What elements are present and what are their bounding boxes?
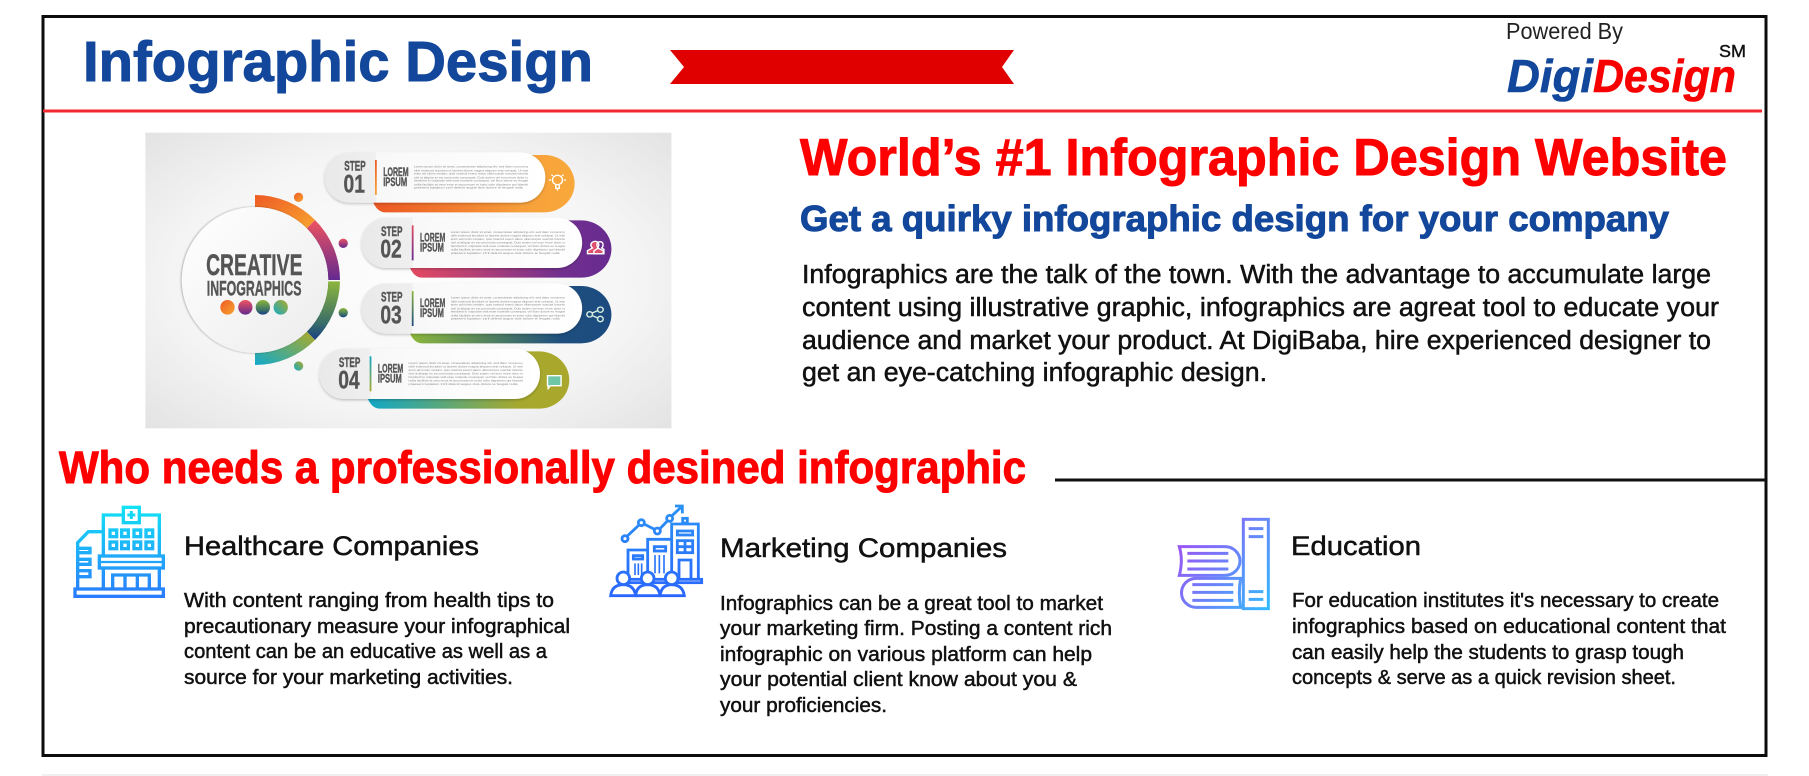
panel: step 02: hendrerit in vulputate velit esse molestie consequat, vel illum dolore eu feugiat — [451, 244, 565, 248]
panel: step 04: IPSUM — [378, 371, 402, 385]
panel: step 03: praesent luptatum zzril delenit augue duis dolore te feugait nulla — [451, 317, 560, 321]
panel: step 04: praesent luptatum zzril delenit augue duis dolore te feugait nulla — [409, 382, 518, 386]
circular badge — [182, 193, 348, 371]
body text: your potential client know about you & — [720, 668, 1077, 691]
header divider — [43, 110, 1762, 112]
panel: step 03: nibh euismod tincidunt ut laoreet dolore magna aliquam erat volutpat. Ut wisi — [451, 299, 565, 303]
intro paragraph: content using illustrative graphic, infographics are agreat tool to educate your — [802, 294, 1720, 322]
panel: step 03: hendrerit in vulputate velit esse molestie consequat, vel illum dolore eu feugiat — [451, 310, 565, 314]
heading: Education — [1291, 531, 1421, 561]
body text: precautionary measure your infographical — [184, 615, 570, 638]
heading: Healthcare Companies — [184, 531, 479, 561]
panel: step 03: nisl ut aliquip ex ea commodo consequat. Duis autem vel eum iriure dolor in — [451, 306, 565, 310]
panel: step 04: nibh euismod tincidunt ut laoreet dolore magna aliquam erat volutpat. Ut wisi — [409, 365, 523, 369]
panel: step 03: 03 — [380, 300, 402, 329]
intro paragraph: get an eye-catching infographic design. — [802, 359, 1267, 387]
panel: step 01: enim ad minim veniam, quis nostrud exerci tation ullamcorper suscipit lobortis — [414, 172, 529, 176]
header — [83, 18, 1746, 102]
intro paragraph: audience and market your product. At DigiBaba, hire experienced designer to — [802, 327, 1711, 355]
logo: DigiDesign: Design — [1593, 50, 1736, 102]
title: Infographic Design — [83, 30, 593, 94]
coloured ring — [255, 195, 340, 365]
badge heading: CREATIVE — [206, 248, 302, 282]
icon: light bulb — [549, 175, 566, 191]
infographic image panel — [145, 133, 671, 428]
panel: step 04: LOREM — [378, 361, 403, 375]
panel: step 01: LOREM — [383, 164, 409, 179]
logo: DigiDesign: Digi — [1507, 50, 1594, 102]
panel: step 04 — [319, 349, 569, 409]
bottom strip — [42, 774, 1768, 776]
panel: marketing — [611, 506, 1112, 717]
subheading: Get a quirky infographic design for your company — [800, 198, 1669, 239]
body text: source for your marketing activities. — [184, 666, 513, 689]
panel: step 02: nulla facilisis at vero eros et accumsan et iusto odio dignissim qui blandit — [451, 248, 565, 252]
panel: step 03: LOREM — [420, 295, 445, 310]
panel: step 04: STEP — [339, 355, 361, 371]
badge subheading: INFOGRAPHICS — [207, 276, 301, 300]
panel: intro — [800, 129, 1727, 387]
panel: step 04: hendrerit in vulputate velit esse molestie consequat, vel illum dolore eu feugiat — [409, 375, 523, 379]
logo: DigiDesign: SM — [1719, 41, 1746, 61]
intro paragraph: Infographics are the talk of the town. With the advantage to accumulate large — [802, 261, 1711, 289]
panel: step 01: nulla facilisis at vero eros et accumsan et iusto odio dignissim qui blandit — [414, 182, 528, 186]
heading: Marketing Companies — [720, 533, 1007, 563]
panel: step 03 — [361, 283, 611, 343]
panel: step 01: STEP — [344, 159, 366, 175]
panel: step 01: nisl ut aliquip ex ea commodo consequat. Duis autem vel eum iriure dolor in — [414, 175, 529, 179]
panel: step 01: 01 — [344, 169, 365, 198]
main heading: World’s #1 Infographic Design Website — [800, 129, 1727, 187]
panel: step 02: enim ad minim veniam, quis nostrud exerci tation ullamcorper suscipit lobortis — [451, 237, 565, 241]
panel: step 02: praesent luptatum zzril delenit augue duis dolore te feugait nulla — [451, 251, 560, 255]
panel: step 02 — [361, 218, 611, 278]
body text — [720, 592, 1112, 717]
panel: step 02: nisl ut aliquip ex ea commodo consequat. Duis autem vel eum iriure dolor in — [451, 241, 565, 245]
panel: step 02: nibh euismod tincidunt ut laoreet dolore magna aliquam erat volutpat. Ut wisi — [451, 234, 565, 238]
icon: people — [587, 241, 604, 254]
panel: step 04: 04 — [338, 366, 360, 394]
body text — [184, 589, 570, 689]
panel: step 01: hendrerit in vulputate velit esse molestie consequat, vel illum dolore eu feugiat — [414, 179, 528, 183]
icon: city growth — [611, 506, 702, 596]
logo: DigiDesign — [1506, 18, 1746, 102]
body text: concepts & serve as a quick revision sheet. — [1292, 666, 1676, 689]
panel: step 02: 02 — [380, 235, 402, 263]
panel: step 01: IPSUM — [383, 174, 407, 189]
section rule — [1055, 478, 1766, 482]
icon: books — [1179, 519, 1268, 609]
body text: For education institutes it's necessary to create — [1292, 589, 1719, 612]
panel: step 01 — [325, 152, 575, 212]
body text: With content ranging from health tips to — [184, 589, 554, 612]
icon: share — [587, 307, 603, 322]
panel: step 02: LOREM — [420, 230, 445, 244]
body text: infographics based on educational content that — [1292, 615, 1726, 638]
icon: chat bubble — [547, 376, 561, 388]
panel: step 03: Lorem ipsum dolor sit amet, consectetuer adipiscing elit, sed diam nonummy — [451, 296, 565, 300]
body text: Infographics can be a great tool to market — [720, 592, 1103, 615]
white disc — [182, 207, 328, 353]
body text: your marketing firm. Posting a content rich — [720, 617, 1112, 640]
panel: education — [1179, 519, 1726, 689]
connector dots — [294, 193, 348, 371]
icon: hospital — [75, 507, 163, 596]
panel: step 01: nibh euismod tincidunt ut laoreet dolore magna aliquam erat volutpat. Ut wisi — [414, 168, 529, 172]
panel: step 02: STEP — [381, 224, 403, 240]
panel: step 03: enim ad minim veniam, quis nostrud exerci tation ullamcorper suscipit lobortis — [451, 303, 565, 307]
body text: infographic on various platform can help — [720, 643, 1092, 666]
panel: step 03: nulla facilisis at vero eros et accumsan et iusto odio dignissim qui blandit — [451, 313, 565, 317]
body text: can easily help the students to grasp tough — [1292, 641, 1684, 664]
panel: step 04: nisl ut aliquip ex ea commodo consequat. Duis autem vel eum iriure dolor in — [409, 372, 523, 376]
panel: step 03: IPSUM — [420, 305, 444, 320]
panel: step 04: Lorem ipsum dolor sit amet, consectetuer adipiscing elit, sed diam nonummy — [409, 361, 523, 365]
logo: DigiDesign: Powered By — [1506, 18, 1623, 44]
panel: step 04: nulla facilisis at vero eros et accumsan et iusto odio dignissim qui blandit — [409, 379, 523, 383]
panel: step 01: praesent luptatum zzril delenit augue duis dolore te feugait nulla — [414, 186, 523, 190]
panel: step 02: Lorem ipsum dolor sit amet, consectetuer adipiscing elit, sed diam nonummy — [451, 230, 565, 234]
panel: step 02: IPSUM — [420, 240, 444, 254]
section heading: Who needs a professionally desined infographic — [59, 442, 1026, 493]
panel: step 03: STEP — [381, 290, 403, 306]
panel: step 01: Lorem ipsum dolor sit amet, consectetuer adipiscing elit, sed diam nonummy — [414, 165, 529, 169]
red ribbon — [670, 50, 1014, 84]
intro paragraph — [802, 261, 1720, 387]
panel: healthcare — [75, 507, 570, 689]
four colour dots — [220, 300, 288, 315]
body text: your proficiencies. — [720, 694, 887, 717]
panel: step 04: enim ad minim veniam, quis nostrud exerci tation ullamcorper suscipit lobortis — [409, 368, 523, 372]
body text — [1292, 589, 1726, 689]
body text: content can be an educative as well as a — [184, 640, 548, 663]
